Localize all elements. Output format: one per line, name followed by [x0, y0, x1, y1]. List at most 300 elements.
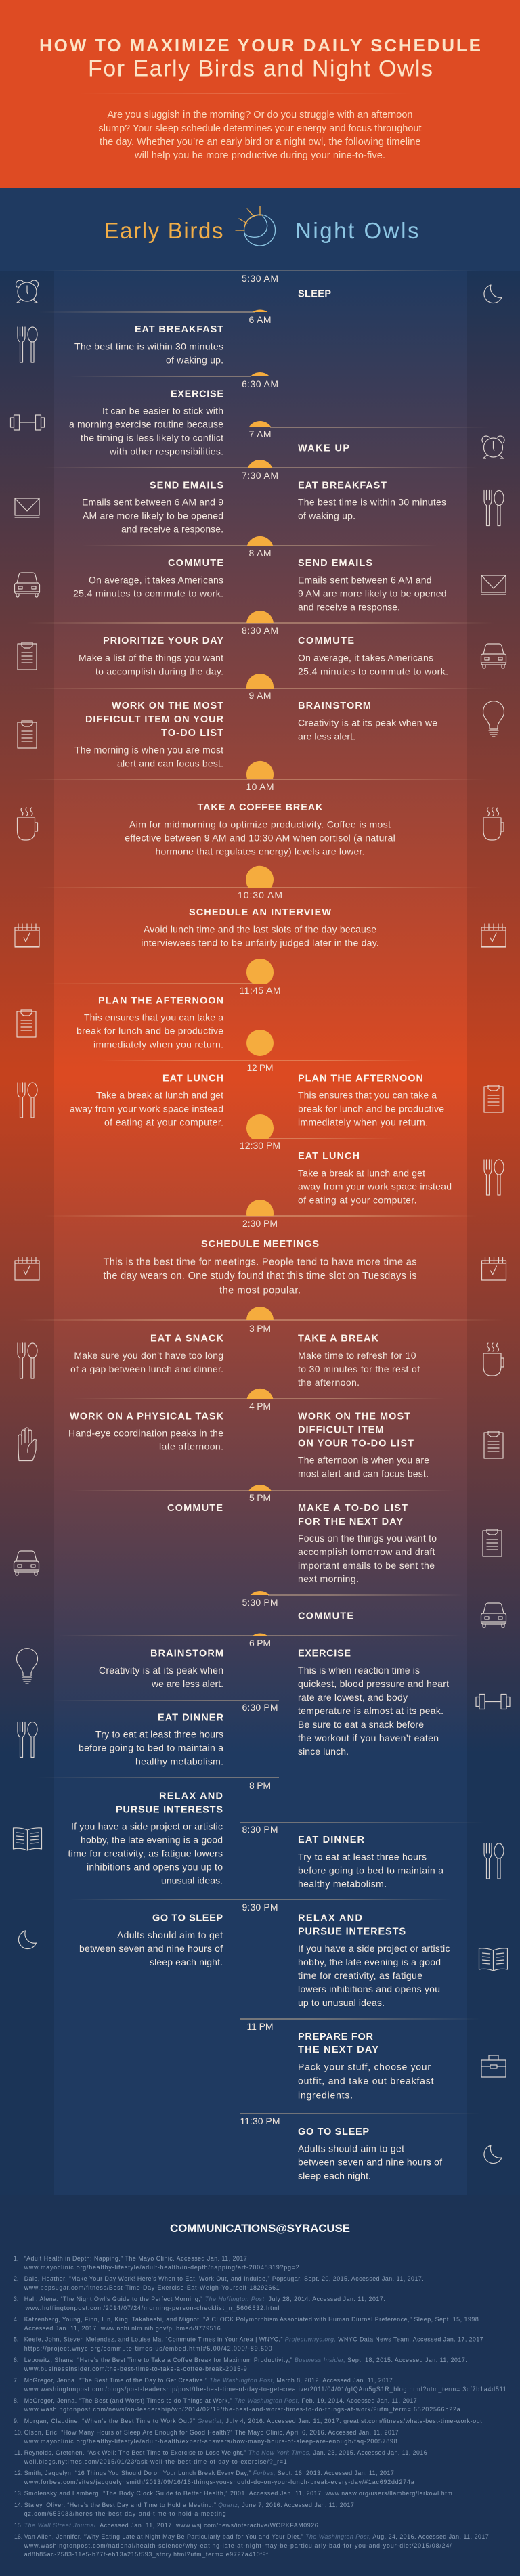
- night owls: eat dinner: Try to eat at least three hours: [298, 1851, 427, 1862]
- night owls: eat lunch: Take a break at lunch and get: [298, 1167, 425, 1178]
- icon: calendar: [482, 1257, 506, 1280]
- time marker: 10 AM: 10 AM: [246, 781, 274, 792]
- references: qz.com/653033/heres-the-best-day-and-time-to-hold-a-meeting: [24, 2510, 226, 2517]
- night owls: eat lunch: [298, 1151, 452, 1205]
- shared: schedule an interview: [141, 907, 379, 948]
- early birds: plan the afternoon: immediately when you return.: [93, 1039, 223, 1050]
- early birds: relax and pursue interests: time for creativity, as fatigue lowers: [68, 1848, 223, 1859]
- icon: fork and spoon: [18, 327, 37, 362]
- early birds: brainstorm: BRAINSTORM: [150, 1649, 223, 1659]
- night owls: exercise: quickest, blood pressure and heart: [298, 1678, 449, 1689]
- night owls: brainstorm: BRAINSTORM: [298, 701, 371, 712]
- night owls: take a break: to 30 minutes for the rest of: [298, 1363, 420, 1374]
- early birds: eat a snack: of a gap between lunch and dinner.: [70, 1363, 223, 1374]
- references: 8.: [14, 2397, 18, 2404]
- night owls: most difficult item: most alert and can focus best.: [298, 1468, 429, 1479]
- time marker: 8 AM: [81, 536, 438, 559]
- title: For Early Birds and Night Owls: [88, 56, 433, 81]
- early birds: eat lunch: [70, 1074, 223, 1128]
- night owls: brainstorm: Creativity is at its peak when we: [298, 717, 437, 728]
- early birds: brainstorm: we are less alert.: [151, 1678, 223, 1689]
- icon: light bulb: [16, 1649, 38, 1684]
- night owls: exercise: temperature is almost at its peak.: [298, 1705, 443, 1716]
- early birds: eat a snack: EAT A SNACK: [150, 1334, 224, 1345]
- intro paragraph: the day. Whether you’re an early bird or a night owl, the following timeline: [100, 137, 421, 148]
- early birds: eat lunch: Take a break at lunch and get: [96, 1090, 223, 1101]
- night owls: relax and pursue interests: RELAX AND: [298, 1913, 362, 1924]
- night owls: exercise: This is when reaction time is: [298, 1665, 420, 1676]
- night owls: most difficult item: DIFFICULT ITEM: [298, 1424, 383, 1435]
- references: www.mayoclinic.org/healthy-lifestyle/adult-health/expert-answers/how-many-hours-of-sleep-are-enough/faq-20057898: [24, 2438, 397, 2445]
- night owls: relax and pursue interests: lowers inhibitions and opens you: [298, 1984, 440, 1994]
- night owls: most difficult item: WORK ON THE MOST: [298, 1411, 410, 1422]
- references: Katzenberg, Young, Finn, Lin, King, Takahashi, and Mignot. “A CLOCK Polymorphism Associated with Human Diurnal Preference,” Sleep, Sept. 15, 1998.: [24, 2316, 481, 2323]
- legend: early birds: Early Birds: [104, 218, 223, 243]
- references: 10.: [14, 2429, 22, 2436]
- night owls: go to sleep: [298, 2126, 442, 2181]
- night owls: send emails: 9 AM are more likely to be opened: [298, 588, 447, 598]
- time marker: 7:30 AM: 7:30 AM: [242, 470, 278, 481]
- time marker: 4 PM: 4 PM: [249, 1401, 271, 1412]
- brand: COMMUNICATIONS@SYRACUSE: [170, 2222, 350, 2235]
- early birds: most difficult item: WORK ON THE MOST: [112, 701, 223, 712]
- timeline background: [0, 271, 520, 2195]
- icon: alarm clock: [482, 436, 504, 458]
- early birds: plan the afternoon: break for lunch and be productive: [77, 1026, 223, 1036]
- night owls: eat breakfast: EAT BREAKFAST: [298, 480, 387, 491]
- time marker: 7 AM: 7 AM: [249, 429, 271, 439]
- early birds: eat breakfast: of waking up.: [166, 355, 223, 366]
- icon: dumbbell: [11, 415, 45, 430]
- night owls: commute: 25.4 minutes to commute to work.: [298, 665, 448, 676]
- early birds: most difficult item: [74, 701, 224, 768]
- references: Reynolds, Gretchen. “Ask Well: The Best Time to Exercise to Lose Weight,” The New York Times, Jan. 23, 2015. Accessed Jan. 11, 2016: [24, 2449, 427, 2456]
- night owls: make a to-do list: FOR THE NEXT DAY: [298, 1516, 403, 1527]
- night owls: send emails: Emails sent between 6 AM and: [298, 574, 432, 585]
- early birds: eat a snack: Make sure you don’t have too long: [74, 1350, 223, 1361]
- early birds: exercise: with other responsibilities.: [109, 446, 223, 457]
- early birds: eat dinner: before going to bed to maintain a: [79, 1743, 223, 1753]
- night owls: go to sleep: GO TO SLEEP: [298, 2126, 369, 2137]
- title: [39, 35, 481, 81]
- early birds: work on a physical task: late afternoon.: [159, 1441, 223, 1452]
- time marker: 6 PM: 6 PM: [249, 1638, 271, 1649]
- time marker: 9:30 PM: 9:30 PM: [242, 1902, 278, 1913]
- shared: schedule an interview: SCHEDULE AN INTERVIEW: [189, 907, 331, 918]
- icon: car: [481, 644, 506, 668]
- icon: briefcase: [481, 2055, 506, 2077]
- time marker: 11:30 PM: 11:30 PM: [240, 2116, 280, 2126]
- time marker: 12 PM: [100, 1030, 421, 1073]
- early birds: go to sleep: Adults should aim to get: [117, 1929, 223, 1940]
- icon: fork and spoon: [484, 1843, 504, 1879]
- early birds: most difficult item: DIFFICULT ITEM ON YOUR: [85, 714, 224, 725]
- early birds: relax and pursue interests: PURSUE INTERESTS: [116, 1805, 223, 1816]
- icon: fork and spoon: [18, 1722, 37, 1758]
- icon: coffee mug: [483, 808, 504, 840]
- shared: schedule meetings: [103, 1239, 417, 1296]
- references: Smith, Jaquelyn. “16 Things You Should Do on Your Lunch Break Every Day,” Forbes, Sept. 16, 2013. Accessed Jan. 11, 2017.: [24, 2470, 396, 2476]
- early birds: send emails: Emails sent between 6 AM and 9: [82, 497, 223, 508]
- early birds: commute: 25.4 minutes to commute to work.: [73, 588, 223, 598]
- night owls: take a break: the afternoon.: [298, 1377, 360, 1388]
- references: https://project.wnyc.org/commute-times-us/embed.html#5.00/42.000/-89.500: [24, 2345, 272, 2352]
- night owls: sleep: SLEEP: [298, 288, 331, 299]
- time marker: 8:30 AM: [26, 611, 494, 636]
- references: well.blogs.nytimes.com/2015/01/23/ask-well-the-best-time-of-day-to-exercise/?_r=1: [24, 2458, 287, 2465]
- time marker: 6:30 AM: [70, 372, 278, 389]
- night owls: plan the afternoon: break for lunch and be productive: [298, 1104, 444, 1114]
- references: 13.: [14, 2490, 22, 2497]
- night owls: exercise: [298, 1649, 449, 1757]
- night owls: prepare for the next day: [298, 2032, 434, 2101]
- icon: car: [15, 573, 39, 597]
- early birds: relax and pursue interests: hobby, the late evening is a good: [81, 1835, 223, 1846]
- icon: clipboard: [483, 1529, 502, 1556]
- early birds: plan the afternoon: [77, 995, 223, 1050]
- early birds: plan the afternoon: PLAN THE AFTERNOON: [98, 995, 223, 1006]
- night owls: send emails: and receive a response.: [298, 601, 400, 612]
- time marker: 8:30 PM: 8:30 PM: [242, 1824, 278, 1835]
- early birds: eat a snack: [70, 1334, 224, 1374]
- night owls: eat dinner: before going to bed to maintain a: [298, 1864, 443, 1875]
- references: www.popsugar.com/fitness/Best-Time-Day-Exercise-Eat-Weigh-Yourself-18292661: [24, 2284, 280, 2291]
- icon: moon: [484, 285, 502, 303]
- references: 2.: [14, 2275, 18, 2282]
- shared: schedule an interview: Avoid lunch time and the last slots of the day because: [144, 924, 376, 935]
- night owls: make a to-do list: MAKE A TO-DO LIST: [298, 1503, 408, 1514]
- icon: clipboard: [17, 1010, 36, 1037]
- time marker: 6:30 AM: 6:30 AM: [242, 378, 278, 389]
- icon: coffee mug: [483, 1343, 504, 1376]
- early birds: work on a physical task: WORK ON A PHYSICAL TASK: [70, 1411, 224, 1422]
- time marker: 6 AM: 6 AM: [249, 314, 271, 325]
- night owls: exercise: the workout if you haven’t eaten: [298, 1732, 439, 1743]
- early birds: send emails: AM are more likely to be opened: [83, 510, 223, 521]
- references: 7.: [14, 2377, 18, 2384]
- night owls: go to sleep: sleep each night.: [298, 2170, 371, 2181]
- intro paragraph: will help you be more productive during your nine-to-five.: [134, 150, 385, 161]
- references: www.washingtonpost.com/news/on-leadership/wp/2014/02/19/the-best-and-worst-times-to-do-things-at-work/?utm_term=.65202566b22a: [24, 2406, 460, 2413]
- night owls: make a to-do list: [298, 1503, 437, 1584]
- early birds: exercise: a morning exercise routine because: [69, 419, 223, 430]
- night owls: commute: On average, it takes Americans: [298, 652, 433, 663]
- icon: fork and spoon: [484, 490, 504, 525]
- footer panel: [0, 2195, 520, 2576]
- time marker: 2:30 PM: 2:30 PM: [242, 1218, 278, 1229]
- early birds: prioritize your day: PRIORITIZE YOUR DAY: [103, 636, 223, 647]
- night owls: commute home: COMMUTE: [298, 1611, 353, 1622]
- time marker: 5 PM: 5 PM: [249, 1492, 271, 1503]
- early birds: eat breakfast: EAT BREAKFAST: [135, 324, 223, 335]
- night owls: relax and pursue interests: If you have a side project or artistic: [298, 1943, 450, 1954]
- early birds: relax and pursue interests: RELAX AND: [159, 1791, 223, 1802]
- night owls: relax and pursue interests: time for creativity, as fatigue: [298, 1970, 422, 1981]
- night owls: plan the afternoon: This ensures that you can take a: [298, 1090, 437, 1101]
- icon: book: [14, 1828, 42, 1850]
- time marker: 4 PM: [73, 1389, 445, 1412]
- references: 1.: [14, 2255, 18, 2262]
- shared: schedule meetings: the day wears on. One study found that this time slot on Tuesdays is: [103, 1271, 417, 1282]
- time marker: 10 AM: [20, 761, 488, 792]
- night owls: exercise: EXERCISE: [298, 1649, 351, 1659]
- early birds: brainstorm: [99, 1649, 223, 1689]
- icon: car: [481, 1603, 506, 1628]
- early birds: go to sleep: sleep each night.: [150, 1957, 223, 1967]
- icon: clipboard: [484, 1085, 503, 1112]
- early birds: relax and pursue interests: If you have a side project or artistic: [71, 1821, 223, 1832]
- night owls: brainstorm: [298, 701, 437, 741]
- time marker: 5:30 PM: [242, 1591, 464, 1608]
- night owls: prepare for the next day: Pack your stuff, choose your: [298, 2061, 431, 2072]
- night owls: commute: [298, 636, 448, 676]
- references: 12.: [14, 2470, 22, 2476]
- references: Staley, Oliver. “Here’s the Best Day and Time to Hold a Meeting,” Quartz, June 7, 2016. Accessed Jan. 11, 2017.: [24, 2502, 356, 2508]
- night owls: eat dinner: [298, 1835, 443, 1889]
- shared: take a coffee break: [125, 802, 395, 856]
- night owls: go to sleep: between seven and nine hours of: [298, 2156, 442, 2167]
- night owls: take a break: TAKE A BREAK: [298, 1334, 379, 1345]
- time marker: 6:30 PM: 6:30 PM: [242, 1702, 278, 1713]
- shared: take a coffee break: TAKE A COFFEE BREAK: [198, 802, 323, 813]
- early birds: relax and pursue interests: [68, 1791, 223, 1886]
- references: The Wall Street Journal. Accessed Jan. 11, 2017. www.wsj.com/news/interactive/WORKFAM0926: [24, 2522, 318, 2529]
- references: 6.: [14, 2357, 18, 2363]
- time marker: 8 AM: 8 AM: [249, 548, 271, 559]
- early birds: commute home: COMMUTE: [167, 1503, 223, 1514]
- night owls: plan the afternoon: PLAN THE AFTERNOON: [298, 1074, 423, 1085]
- icon: fork and spoon: [18, 1343, 37, 1378]
- icon: clipboard: [484, 1431, 503, 1458]
- references: Lebowitz, Shana. “Here’s the Best Time to Take a Coffee Break for Maximum Productivity,” Business Insider, Sept. 18, 2015. Accessed Jan. 11, 2017.: [24, 2357, 467, 2363]
- night owls: eat lunch: of eating at your computer.: [298, 1194, 417, 1205]
- intro paragraph: slump? Your sleep schedule determines your energy and focus throughout: [99, 123, 421, 134]
- night owls: make a to-do list: accomplish tomorrow and draft: [298, 1546, 435, 1557]
- time marker: 11 PM: 11 PM: [246, 2021, 274, 2032]
- icon: fork and spoon: [18, 1083, 37, 1118]
- references: 3.: [14, 2296, 18, 2302]
- early birds: relax and pursue interests: inhibitions and opens you up to: [87, 1862, 223, 1873]
- time marker: 6 PM: [58, 1634, 461, 1649]
- early birds: eat lunch: away from your work space instead: [70, 1104, 223, 1114]
- night owls: make a to-do list: important emails to be sent the: [298, 1560, 435, 1571]
- early birds: send emails: and receive a response.: [121, 524, 223, 535]
- early birds: eat dinner: healthy metabolism.: [135, 1756, 223, 1767]
- time marker: 8 PM: 8 PM: [249, 1780, 271, 1791]
- icon: coffee mug: [18, 808, 38, 840]
- icon: envelope: [481, 575, 506, 594]
- early birds: commute: On average, it takes Americans: [89, 574, 223, 585]
- night owls: relax and pursue interests: up to unusual ideas.: [298, 1997, 385, 2008]
- night owls: eat breakfast: The best time is within 30 minutes: [298, 497, 446, 508]
- references: “Adult Health in Depth: Napping,” The Mayo Clinic. Accessed Jan. 11, 2017.: [24, 2255, 249, 2262]
- icon: moon: [18, 1931, 37, 1949]
- references: www.mayoclinic.org/healthy-lifestyle/adult-health/in-depth/napping/art-20048319?pg=2: [24, 2264, 299, 2271]
- legend: night owls: Night Owls: [295, 218, 418, 243]
- header panel: [0, 0, 520, 188]
- time marker: 8:30 AM: 8:30 AM: [242, 625, 278, 636]
- night owls: exercise: Be sure to eat a snack before: [298, 1719, 424, 1730]
- time marker: 12 PM: 12 PM: [246, 1062, 274, 1073]
- night owls: make a to-do list: Focus on the things you want to: [298, 1533, 437, 1544]
- time marker: 3 PM: [17, 1307, 504, 1334]
- night owls: send emails: SEND EMAILS: [298, 558, 372, 569]
- night owls: eat breakfast: [298, 480, 446, 521]
- early birds: commute: [73, 558, 223, 598]
- night owls: prepare for the next day: THE NEXT DAY: [298, 2045, 378, 2055]
- early birds: commute: COMMUTE: [168, 558, 223, 569]
- time marker: 6 AM: [38, 310, 271, 325]
- night owls: relax and pursue interests: [298, 1913, 450, 2008]
- early birds: eat lunch: EAT LUNCH: [162, 1074, 223, 1085]
- intro paragraph: Are you sluggish in the morning? Or do you struggle with an afternoon: [107, 110, 413, 121]
- icon: car: [14, 1551, 39, 1575]
- time marker: 7:30 AM: [43, 460, 478, 481]
- icon: book: [479, 1948, 508, 1971]
- early birds: eat dinner: [79, 1713, 224, 1767]
- icon: dumbbell: [476, 1694, 510, 1709]
- early birds: relax and pursue interests: unusual ideas.: [161, 1875, 223, 1886]
- icon: calendar: [15, 1257, 39, 1280]
- early birds: eat breakfast: The best time is within 30 minutes: [74, 341, 223, 352]
- references: 11.: [14, 2449, 22, 2456]
- icon: calendar: [15, 924, 39, 947]
- references: Dale, Heather. “Make Your Day Work! Here’s When to Eat, Work Out, and Indulge,” Popsugar, Sept. 20, 2015. Accessed Jan. 11, 2017.: [24, 2275, 424, 2282]
- icon: envelope: [15, 498, 39, 517]
- night owls: take a break: [298, 1334, 420, 1388]
- early birds: exercise: EXERCISE: [171, 389, 223, 399]
- early birds: brainstorm: Creativity is at its peak when: [99, 1665, 223, 1676]
- shared: schedule meetings: This is the best time for meetings. People tend to have more time as: [103, 1257, 417, 1267]
- night owls: brainstorm: are less alert.: [298, 730, 355, 741]
- time marker: 5 PM: [70, 1485, 455, 1503]
- icon: alarm clock: [16, 280, 39, 303]
- time marker: 2:30 PM: [43, 1200, 478, 1229]
- shared: take a coffee break: effective between 9 AM and 10:30 AM when cortisol (a natural: [125, 832, 395, 843]
- night owls: go to sleep: Adults should aim to get: [298, 2143, 404, 2154]
- references: Hall, Alena. “The Night Owl’s Guide to the Perfect Morning,” The Huffington Post, July 28, 2014. Accessed Jan. 11, 2017.: [24, 2296, 385, 2302]
- references: www.businessinsider.com/the-best-time-to-take-a-coffee-break-2015-9: [24, 2365, 247, 2372]
- early birds: prioritize your day: Make a list of the things you want: [79, 652, 223, 663]
- night owls: relax and pursue interests: PURSUE INTERESTS: [298, 1927, 406, 1938]
- night owls: exercise: since lunch.: [298, 1746, 349, 1757]
- references: Smolensky and Lamberg. “The Body Clock Guide to Better Health,” 2001. Accessed Jan. 11, 2017. www.nasw.org/users/llamberg/larkowl.htm: [24, 2490, 452, 2497]
- icon: calendar: [481, 924, 506, 947]
- early birds: most difficult item: alert and can focus best.: [117, 758, 223, 768]
- early birds: prioritize your day: [79, 636, 223, 676]
- time marker: 10:30 AM: [37, 866, 483, 900]
- references: www.huffingtonpost.com/2014/07/24/morning-person-checklist_n_5606632.html: [24, 2305, 280, 2311]
- early birds: send emails: [82, 480, 223, 535]
- night owls: make a to-do list: next morning.: [298, 1573, 359, 1584]
- night owls: most difficult item: The afternoon is when you are: [298, 1455, 429, 1466]
- night owls: most difficult item: [298, 1411, 429, 1479]
- time marker: 5:30 PM: 5:30 PM: [242, 1597, 278, 1608]
- icon: clipboard: [18, 642, 37, 670]
- shared: take a coffee break: hormone that regulates energy) levels are lower.: [156, 846, 364, 856]
- night owls: exercise: rate are lowest, and body: [298, 1692, 408, 1703]
- icon: sun and moon: [236, 206, 275, 246]
- references: www.forbes.com/sites/jacquelynsmith/2013/09/16/16-things-you-should-do-on-your-lunch-break-every-day/#1ac692dd274a: [24, 2479, 414, 2485]
- icon: moon: [484, 2145, 502, 2164]
- early birds: work on a physical task: [68, 1411, 224, 1452]
- references: ad8b85ac-2583-11e5-b77f-eb13a215f593_story.html?utm_term=.e9727a410f9f: [24, 2551, 268, 2558]
- early birds: send emails: SEND EMAILS: [150, 480, 223, 491]
- early birds: go to sleep: GO TO SLEEP: [152, 1913, 223, 1924]
- references: Accessed Jan. 11, 2017. www.ncbi.nlm.nih.gov/pubmed/9779516: [24, 2325, 221, 2332]
- icon: clipboard: [18, 721, 37, 748]
- legend band: [0, 188, 520, 271]
- references: Morgan, Claudine. “When’s the Best Time to Work Out?” Greatist, July 4, 2016. Accessed Jan. 11, 2017. greatist.com/fitness/whats-best-time-work-out: [24, 2418, 482, 2424]
- references: Van Allen, Jennifer. “Why Eating Late at Night May Be Particularly bad for You and Your Diet,” The Washington Post, Aug. 24, 2016. Accessed Jan. 11, 2017.: [24, 2533, 491, 2540]
- night owls: most difficult item: ON YOUR TO-DO LIST: [298, 1438, 414, 1449]
- time marker: 3 PM: 3 PM: [249, 1323, 271, 1334]
- time marker: 5:30 AM: 5:30 AM: [242, 273, 278, 284]
- early birds: exercise: It can be easier to stick with: [102, 406, 223, 416]
- early birds: eat dinner: EAT DINNER: [158, 1713, 224, 1724]
- early birds: eat breakfast: [74, 324, 223, 366]
- night owls: wake up: WAKE UP: [298, 443, 349, 454]
- shared: schedule meetings: the most popular.: [219, 1285, 301, 1296]
- icon: fork and spoon: [484, 1160, 504, 1195]
- time marker: 11:45 AM: 11:45 AM: [240, 985, 280, 996]
- icon: hand: [18, 1428, 36, 1461]
- early birds: eat dinner: Try to eat at least three hours: [95, 1729, 223, 1740]
- night owls: plan the afternoon: [298, 1074, 444, 1128]
- shared: take a coffee break: Aim for midmorning to optimize productivity. Coffee is most: [129, 818, 391, 829]
- references: McGregor, Jenna. “The Best (and Worst) Times to do Things at Work,” The Washington Post, Feb. 19, 2014. Accessed Jan. 11, 2017: [24, 2397, 417, 2404]
- early birds: plan the afternoon: This ensures that you can take a: [84, 1012, 223, 1023]
- early birds: most difficult item: TO-DO LIST: [161, 728, 223, 739]
- shared: schedule meetings: SCHEDULE MEETINGS: [201, 1239, 319, 1250]
- early birds: go to sleep: [79, 1913, 223, 1967]
- references: www.washingtonpost.com/blogs/post-leadership/post/the-best-time-of-day-to-get-creative/2011/04/01/gIQAm5gS1R_blog.html?utm_term=.3cf7b1a4d511: [24, 2386, 506, 2393]
- night owls: send emails: [298, 558, 447, 612]
- time marker: 12:30 PM: [240, 1114, 395, 1151]
- references: [14, 2255, 506, 2558]
- early birds: exercise: [69, 389, 223, 457]
- shared: schedule an interview: interviewees tend to be unfairly judged later in the day.: [141, 938, 379, 948]
- night owls: take a break: Make time to refresh for 10: [298, 1350, 416, 1361]
- night owls: eat dinner: healthy metabolism.: [298, 1878, 387, 1889]
- intro paragraph: [99, 110, 421, 161]
- early birds: work on a physical task: Hand-eye coordination peaks in the: [68, 1428, 223, 1439]
- night owls: plan the afternoon: immediately when you return.: [298, 1117, 428, 1128]
- references: 15.: [14, 2522, 22, 2529]
- references: 4.: [14, 2316, 18, 2323]
- time marker: 7 AM: [248, 421, 491, 439]
- night owls: commute: COMMUTE: [298, 636, 354, 647]
- time marker: 9 AM: 9 AM: [249, 690, 271, 701]
- night owls: eat lunch: away from your work space instead: [298, 1181, 452, 1192]
- references: 5.: [14, 2336, 18, 2342]
- references: Keefe, John, Steven Melendez, and Louise Ma. “Commute Times in Your Area | WNYC,” Project.wnyc.org, WNYC Data News Team, Accessed Jan. 17, 2017: [24, 2336, 483, 2342]
- early birds: most difficult item: The morning is when you are most: [74, 744, 223, 755]
- early birds: eat lunch: of eating at your computer.: [104, 1117, 223, 1128]
- references: 9.: [14, 2418, 18, 2424]
- night owls: prepare for the next day: outfit, and take out breakfast: [298, 2076, 434, 2087]
- references: 16.: [14, 2533, 22, 2540]
- early birds: exercise: the timing is less likely to conflict: [81, 433, 223, 443]
- references: www.washingtonpost.com/national/health-science/why-eating-late-at-night-may-be-particularly-bad-for-you-and-your-diet/2015/08/24/: [24, 2542, 452, 2549]
- references: McGregor, Jenna. “The Best Time of the Day to Get Creative,” The Washington Post, March 8, 2012. Accessed Jan. 11, 2017.: [24, 2377, 395, 2384]
- night owls: relax and pursue interests: hobby, the late evening is a good: [298, 1957, 441, 1967]
- references: 14.: [14, 2502, 22, 2508]
- time marker: 10:30 AM: 10:30 AM: [238, 890, 282, 900]
- references: Olson, Eric. “How Many Hours of Sleep Are Enough for Good Health?” The Mayo Clinic, April 6, 2016. Accessed Jan. 11, 2017: [24, 2429, 399, 2436]
- time marker: 12:30 PM: 12:30 PM: [240, 1140, 280, 1151]
- night owls: prepare for the next day: PREPARE FOR: [298, 2032, 374, 2043]
